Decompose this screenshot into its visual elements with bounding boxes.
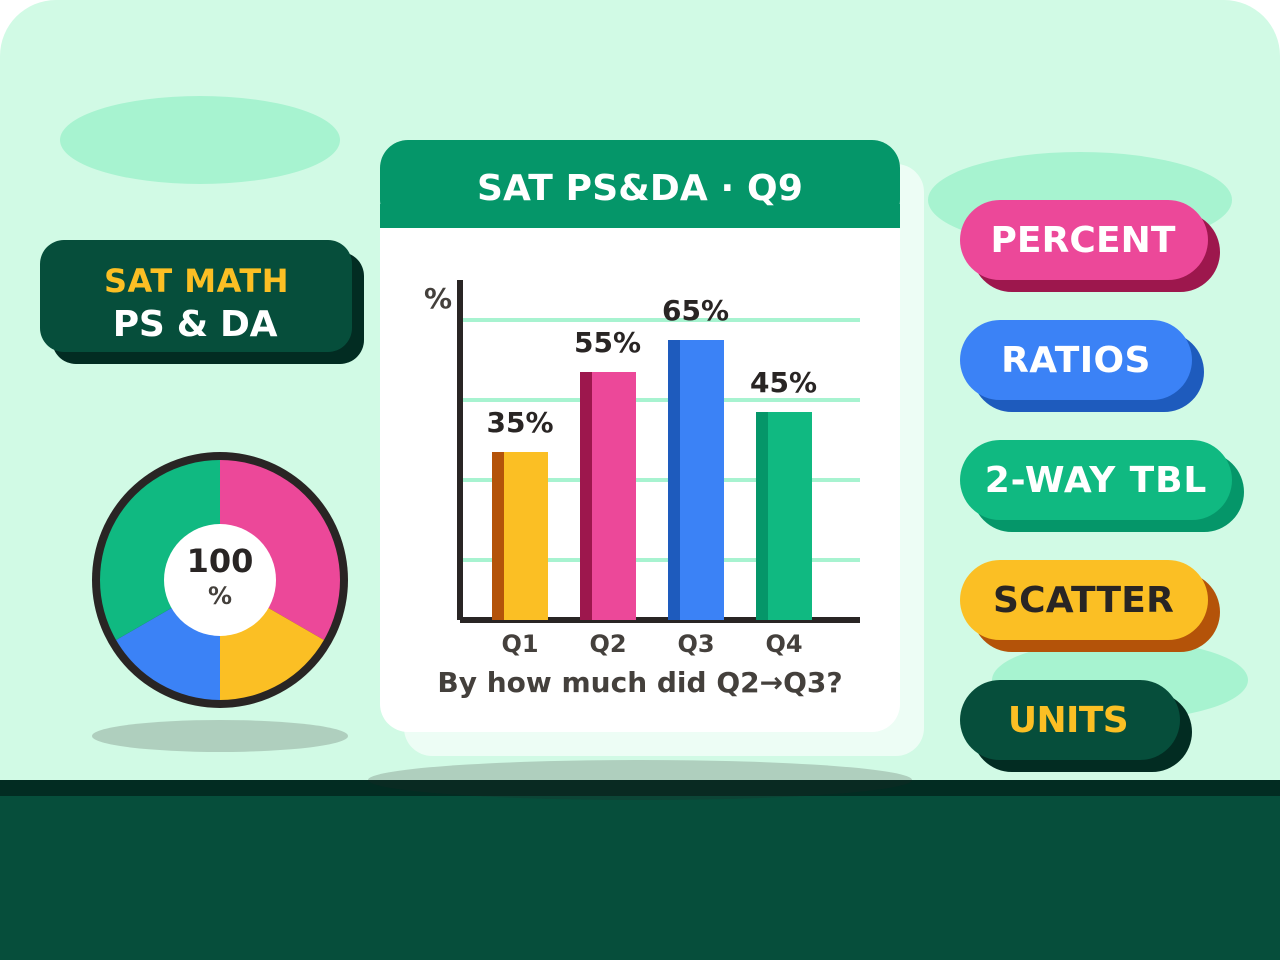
label Q3: Q3 [677, 630, 715, 658]
label Q1: Q1 [501, 630, 539, 658]
badge line: SAT MATH: SAT MATH [104, 262, 289, 300]
tag: RATIOS: RATIOS [1001, 340, 1151, 381]
y axis unit: % [424, 282, 452, 315]
tag: SCATTER: SCATTER [993, 580, 1174, 621]
badge line: PS & DA: PS & DA [113, 304, 278, 345]
cloud: bottom right [992, 640, 1248, 720]
value Q2: 55% [574, 326, 641, 359]
label Q4: Q4 [765, 630, 803, 658]
tag: RATIOS [960, 320, 1204, 412]
card header [380, 140, 900, 228]
tag: SCATTER [960, 560, 1220, 652]
card face [380, 140, 900, 732]
x axis [460, 617, 860, 623]
slice: green [100, 460, 220, 640]
donut hole [164, 524, 276, 636]
chart: donut [92, 452, 348, 708]
y axis [457, 280, 463, 620]
bar Q4 [756, 412, 812, 620]
value Q3: 65% [662, 294, 729, 327]
card ground shadow [368, 760, 912, 800]
card heading: SAT PS&DA · Q9 [477, 168, 803, 209]
donut unit: % [208, 582, 232, 610]
tag: 2-WAY TBL: 2-WAY TBL [985, 460, 1207, 501]
value Q1: 35% [486, 406, 554, 439]
label Q2: Q2 [589, 630, 627, 658]
bar chart [424, 280, 860, 658]
panel: title badge [40, 240, 364, 364]
bar Q1 [492, 452, 548, 620]
cloud: top right [928, 152, 1232, 248]
question text: By how much did Q2→Q3? [437, 666, 843, 699]
floor [0, 780, 1280, 960]
value Q4: 45% [750, 366, 817, 399]
tag: PERCENT: PERCENT [990, 220, 1176, 261]
card back layer [404, 164, 924, 756]
cloud: top left [60, 96, 340, 184]
bar Q3 [668, 340, 724, 620]
donut value: 100 [187, 542, 253, 580]
tag: UNITS: UNITS [1008, 700, 1128, 741]
panel: question card [380, 140, 924, 756]
tag: PERCENT [960, 200, 1220, 292]
slice: yellow [220, 580, 324, 700]
slice: blue [116, 580, 220, 700]
donut ground shadow [92, 720, 348, 752]
slice: pink [220, 460, 340, 640]
tag: UNITS [960, 680, 1192, 772]
bar Q2 [580, 372, 636, 620]
tag: 2-WAY TBL [960, 440, 1244, 532]
